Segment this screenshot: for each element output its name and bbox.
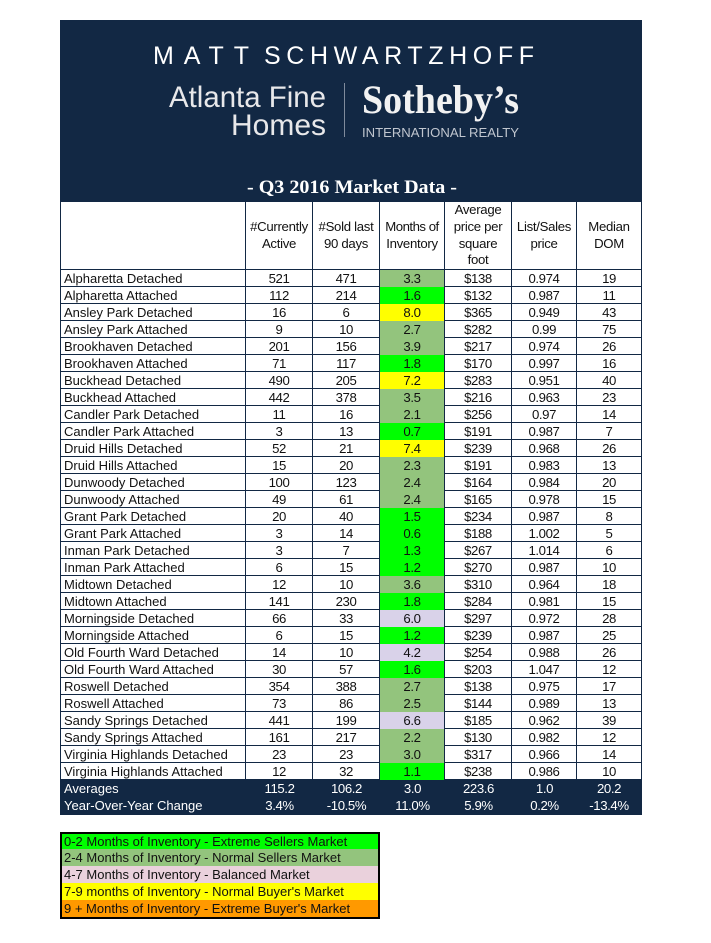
row: Midtown Detached: 10: [339, 577, 353, 592]
row: Sandy Springs Attached: 161: [269, 730, 289, 745]
row: Candler Park Detached: 11: [273, 407, 285, 422]
row: Inman Park Attached: 0.987: [528, 560, 560, 575]
logo: Atlanta Fine Homes: Homes: [231, 109, 326, 142]
row: Virginia Highlands Detached: 14: [602, 747, 616, 762]
row: Roswell Attached: 13: [602, 696, 616, 711]
row: Inman Park Attached: Inman Park Attached: [64, 560, 185, 575]
row: Brookhaven Detached: 26: [602, 339, 616, 354]
row: Druid Hills Attached: $191: [464, 458, 492, 473]
row: Ansley Park Detached: [61, 304, 641, 321]
row: Druid Hills Attached: 0.983: [528, 458, 560, 473]
row: Roswell Detached: 354: [269, 679, 289, 694]
row: Morningside Attached: $239: [464, 628, 492, 643]
row: Grant Park Attached: 0.6: [403, 526, 421, 541]
row: Ansley Park Attached: 9: [276, 322, 282, 337]
row: year-over-year change: [61, 797, 641, 814]
row: Virginia Highlands Detached: $317: [464, 747, 492, 762]
table header row: Median: [588, 219, 630, 234]
row: Old Fourth Ward Detached: 10: [339, 645, 353, 660]
row: Midtown Detached: $310: [464, 577, 492, 592]
row: Grant Park Detached: 40: [339, 509, 353, 524]
row: Roswell Detached: Roswell Detached: [64, 679, 169, 694]
table header row: Active: [262, 236, 296, 250]
row: Old Fourth Ward Attached: 30: [272, 662, 286, 677]
row: Inman Park Detached: 1.3: [403, 543, 421, 558]
row: Dunwoody Detached: Dunwoody Detached: [64, 475, 185, 490]
market data table: [61, 202, 641, 814]
row: Virginia Highlands Attached: Virginia Highlands Attached: [64, 764, 223, 779]
row: Old Fourth Ward Detached: [61, 644, 641, 661]
row: Midtown Attached: $284: [464, 594, 492, 609]
row: Virginia Highlands Detached: 0.966: [528, 747, 560, 762]
row: Sandy Springs Attached: 12: [602, 730, 616, 745]
row: Roswell Attached: 86: [339, 696, 353, 711]
row: Buckhead Attached: 23: [602, 390, 616, 405]
row: Old Fourth Ward Attached: Old Fourth Ward Attached: [64, 662, 214, 677]
row: Morningside Attached: 1.2: [403, 628, 421, 643]
row: Buckhead Attached: 0.963: [528, 390, 560, 405]
row: Morningside Attached: 15: [339, 628, 353, 643]
row: Dunwoody Detached: $164: [464, 475, 492, 490]
row: Brookhaven Attached: 16: [602, 356, 616, 371]
row: averages: [61, 780, 641, 797]
row: Druid Hills Attached: 15: [272, 458, 286, 473]
row: Midtown Attached: 0.981: [528, 594, 560, 609]
row: Alpharetta Detached: 0.974: [528, 271, 560, 286]
row: Candler Park Attached: 13: [339, 424, 353, 439]
row: Sandy Springs Detached: $185: [464, 713, 492, 728]
row: Old Fourth Ward Detached: 14: [272, 645, 286, 660]
legend item: extreme sellers market: 0-2 Months of Inventory - Extreme Sellers Market: [64, 834, 347, 849]
row: Virginia Highlands Detached: 23: [272, 747, 286, 762]
row: Roswell Detached: 0.975: [528, 679, 560, 694]
row: Inman Park Detached: 3: [276, 543, 282, 558]
row: Sandy Springs Attached: $130: [464, 730, 492, 745]
row: Brookhaven Detached: 0.974: [528, 339, 560, 354]
row: Morningside Detached: 33: [339, 611, 353, 626]
row: averages: 20.2: [597, 780, 621, 796]
table header row: Average: [455, 202, 501, 217]
row: Sandy Springs Detached: 6.6: [403, 713, 421, 728]
row: Grant Park Attached: 1.002: [528, 526, 560, 541]
row: year-over-year change: Year-Over-Year Change: [64, 798, 203, 812]
row: Grant Park Detached: [61, 508, 641, 525]
row: Inman Park Attached: 6: [276, 560, 282, 575]
row: Old Fourth Ward Attached: 57: [339, 662, 353, 677]
row: Grant Park Detached: 20: [272, 509, 286, 524]
row: Dunwoody Attached: 2.4: [403, 492, 421, 507]
row: Roswell Attached: [61, 695, 641, 712]
logo: Atlanta Fine Homes: Atlanta Fine: [169, 81, 326, 114]
row: Buckhead Detached: 40: [602, 373, 616, 388]
row: Inman Park Attached: 10: [602, 560, 616, 575]
row: Sandy Springs Detached: 441: [269, 713, 289, 728]
row: year-over-year change: 11.0%: [395, 798, 430, 812]
row: Old Fourth Ward Detached: Old Fourth Ward Detached: [64, 645, 219, 660]
row: Candler Park Attached: 0.987: [528, 424, 560, 439]
panel: navy header and table background: [60, 20, 642, 815]
row: Brookhaven Attached: 71: [272, 356, 286, 371]
row: Roswell Detached: 17: [602, 679, 616, 694]
row: Alpharetta Attached: [61, 287, 641, 304]
row: Inman Park Attached: $270: [464, 560, 492, 575]
row: Sandy Springs Detached: Sandy Springs Detached: [64, 713, 208, 728]
row: Druid Hills Detached: 52: [272, 441, 286, 456]
row: Morningside Attached: Morningside Attached: [64, 628, 189, 643]
row: Alpharetta Detached: [61, 270, 641, 287]
row: Ansley Park Detached: 8.0: [403, 305, 421, 320]
table header row: Inventory: [386, 236, 438, 250]
row: Buckhead Detached: $283: [464, 373, 492, 388]
row: Roswell Detached: 2.7: [403, 679, 421, 694]
row: Morningside Attached: 25: [602, 628, 616, 643]
row: Alpharetta Detached: $138: [464, 271, 492, 286]
row: Virginia Highlands Attached: $238: [464, 764, 492, 779]
row: Ansley Park Attached: 75: [602, 322, 616, 337]
row: Inman Park Detached: Inman Park Detached: [64, 543, 190, 558]
row: Candler Park Attached: 3: [276, 424, 282, 439]
row: Sandy Springs Detached: 39: [602, 713, 616, 728]
row: Candler Park Attached: 0.7: [403, 424, 421, 439]
row: Roswell Attached: 0.989: [528, 696, 560, 711]
row: Sandy Springs Detached: 0.962: [528, 713, 560, 728]
row: Druid Hills Detached: 0.968: [528, 441, 560, 456]
row: Druid Hills Detached: [61, 440, 641, 457]
row: Virginia Highlands Attached: 0.986: [528, 764, 560, 779]
row: Grant Park Detached: $234: [464, 509, 492, 524]
row: Buckhead Attached: 378: [336, 390, 356, 405]
row: Alpharetta Detached: 521: [269, 271, 289, 286]
row: Old Fourth Ward Detached: 4.2: [403, 645, 421, 660]
legend item: extreme buyer's market: 9 + Months of Inventory - Extreme Buyer's Market: [64, 901, 350, 916]
row: Brookhaven Attached: $170: [464, 356, 492, 371]
logo: Sotheby's International Realty: Sotheby’s: [362, 77, 519, 122]
row: Alpharetta Attached: $132: [464, 288, 492, 303]
row: Brookhaven Detached: Brookhaven Detached: [64, 339, 193, 354]
logo divider: [344, 83, 345, 137]
row: Ansley Park Attached: 0.99: [532, 322, 556, 337]
legend: months of inventory colour key: [60, 832, 380, 919]
row: Ansley Park Detached: 6: [343, 305, 349, 320]
row: Brookhaven Attached: Brookhaven Attached: [64, 356, 188, 371]
header: name and brokerage logo: [153, 42, 534, 198]
row: Buckhead Attached: [61, 389, 641, 406]
row: Dunwoody Detached: 100: [269, 475, 289, 490]
row: Buckhead Detached: 0.951: [528, 373, 560, 388]
row: Grant Park Attached: Grant Park Attached: [64, 526, 181, 541]
row: Ansley Park Detached: 16: [272, 305, 286, 320]
table header row: price: [530, 236, 558, 250]
row: year-over-year change: -13.4%: [589, 798, 629, 812]
row: Inman Park Detached: [61, 542, 641, 559]
row: Druid Hills Attached: 20: [339, 458, 353, 473]
row: Buckhead Attached: 442: [269, 390, 289, 405]
table header row: square: [459, 236, 497, 250]
row: Midtown Detached: Midtown Detached: [64, 577, 172, 592]
row: Grant Park Attached: $188: [464, 526, 492, 541]
logo: Sotheby's International Realty: [362, 77, 520, 140]
row: Grant Park Attached: 3: [276, 526, 282, 541]
row: Alpharetta Attached: 1.6: [403, 288, 421, 303]
table header row: [61, 202, 641, 814]
row: Dunwoody Attached: Dunwoody Attached: [64, 492, 180, 507]
row: averages: 115.2: [264, 780, 295, 796]
row: Inman Park Detached: 7: [343, 543, 349, 558]
row: Buckhead Attached: 3.5: [403, 390, 421, 405]
row: averages: 1.0: [536, 780, 553, 796]
row: Sandy Springs Attached: 0.982: [528, 730, 560, 745]
row: Inman Park Detached: $267: [464, 543, 492, 558]
row: Morningside Attached: [61, 627, 641, 644]
row: Brookhaven Detached: 3.9: [403, 339, 421, 354]
row: Midtown Detached: 18: [602, 577, 616, 592]
row: Dunwoody Attached: 15: [602, 492, 616, 507]
row: Grant Park Detached: Grant Park Detached: [64, 509, 186, 524]
row: Druid Hills Attached: Druid Hills Attached: [64, 458, 177, 473]
row: Alpharetta Attached: 214: [336, 288, 356, 303]
row: Dunwoody Attached: [61, 491, 641, 508]
row: Inman Park Attached: 15: [339, 560, 353, 575]
row: Druid Hills Detached: 26: [602, 441, 616, 456]
row: Morningside Detached: 28: [602, 611, 616, 626]
row: Candler Park Detached: Candler Park Detached: [64, 407, 199, 422]
row: Morningside Detached: 66: [272, 611, 286, 626]
row: Dunwoody Detached: 20: [602, 475, 616, 490]
row: Brookhaven Detached: $217: [464, 339, 492, 354]
row: Old Fourth Ward Attached: 12: [602, 662, 616, 677]
row: Buckhead Detached: 205: [336, 373, 356, 388]
row: Ansley Park Detached: 43: [602, 305, 616, 320]
row: Candler Park Detached: 16: [339, 407, 353, 422]
row: Midtown Attached: 230: [336, 594, 356, 609]
row: Ansley Park Attached: $282: [464, 322, 492, 337]
row: year-over-year change: 3.4%: [265, 798, 294, 812]
row: averages: 223.6: [463, 780, 494, 796]
table header row: List/Sales: [517, 219, 571, 234]
row: Druid Hills Detached: 7.4: [403, 441, 421, 456]
row: Candler Park Detached: $256: [464, 407, 492, 422]
row: Dunwoody Attached: 61: [339, 492, 353, 507]
row: Old Fourth Ward Attached: $203: [464, 662, 492, 677]
table header row: DOM: [594, 236, 624, 250]
row: Morningside Detached: 0.972: [528, 611, 560, 626]
row: Old Fourth Ward Detached: $254: [464, 645, 492, 660]
table header row: #Currently: [250, 219, 308, 234]
legend item: normal sellers market: 2-4 Months of Inventory - Normal Sellers Market: [64, 850, 341, 865]
row: Alpharetta Attached: 0.987: [528, 288, 560, 303]
subtitle: Q3 2016 Market Data: - Q3 2016 Market Data -: [247, 177, 457, 198]
row: Brookhaven Detached: [61, 338, 641, 355]
row: Ansley Park Attached: 2.7: [403, 322, 421, 337]
row: Old Fourth Ward Attached: 1.6: [403, 662, 421, 677]
row: Morningside Detached: [61, 610, 641, 627]
row: Midtown Attached: [61, 593, 641, 610]
row: Roswell Attached: $144: [464, 696, 492, 711]
row: Sandy Springs Attached: Sandy Springs Attached: [64, 730, 203, 745]
title: agent name: SCHWARTZHOFF: [264, 42, 534, 70]
row: Ansley Park Attached: Ansley Park Attached: [64, 322, 188, 337]
row: Midtown Attached: 15: [602, 594, 616, 609]
row: Candler Park Detached: 2.1: [403, 407, 421, 422]
row: Alpharetta Attached: 112: [269, 288, 289, 303]
row: Alpharetta Detached: Alpharetta Detached: [64, 271, 183, 286]
row: Virginia Highlands Detached: 3.0: [403, 747, 421, 762]
row: Druid Hills Detached: $239: [464, 441, 492, 456]
row: Alpharetta Attached: Alpharetta Attached: [64, 288, 177, 303]
row: Roswell Detached: [61, 678, 641, 695]
row: Alpharetta Detached: 3.3: [403, 271, 421, 286]
row: averages: 106.2: [331, 780, 362, 796]
row: Ansley Park Attached: [61, 321, 641, 338]
row: Dunwoody Attached: 49: [272, 492, 286, 507]
row: Brookhaven Attached: 0.997: [528, 356, 560, 371]
row: Old Fourth Ward Attached: [61, 661, 641, 678]
row: Buckhead Attached: Buckhead Attached: [64, 390, 176, 405]
row: averages: Averages: [64, 780, 119, 796]
table header row: foot: [468, 252, 488, 267]
row: Roswell Attached: 73: [272, 696, 286, 711]
row: Virginia Highlands Detached: [61, 746, 641, 763]
row: Ansley Park Attached: 10: [339, 322, 353, 337]
row: Dunwoody Detached: 2.4: [403, 475, 421, 490]
logo: Atlanta Fine Homes: [169, 81, 326, 142]
row: Virginia Highlands Detached: 23: [339, 747, 353, 762]
row: Candler Park Attached: $191: [464, 424, 492, 439]
row: Candler Park Attached: [61, 423, 641, 440]
row: Roswell Detached: 388: [336, 679, 356, 694]
row: Ansley Park Detached: 0.949: [528, 305, 560, 320]
row: Midtown Detached: [61, 576, 641, 593]
row: Alpharetta Attached: 11: [603, 288, 615, 303]
title: agent name: MATT: [153, 42, 249, 70]
row: Roswell Attached: Roswell Attached: [64, 696, 164, 711]
row: Inman Park Attached: [61, 559, 641, 576]
row: Buckhead Attached: $216: [464, 390, 492, 405]
row: Grant Park Attached: 14: [339, 526, 353, 541]
row: Virginia Highlands Attached: 32: [339, 764, 353, 779]
row: year-over-year change: 0.2%: [530, 798, 559, 812]
table header row: 90 days: [324, 236, 368, 250]
legend item: balanced market: 4-7 Months of Inventory - Balanced Market: [64, 867, 310, 882]
row: Sandy Springs Attached: 2.2: [403, 730, 421, 745]
row: averages: 3.0: [404, 780, 421, 796]
row: Morningside Attached: 6: [276, 628, 282, 643]
row: Buckhead Detached: [61, 372, 641, 389]
row: Sandy Springs Detached: [61, 712, 641, 729]
row: Druid Hills Detached: 21: [339, 441, 353, 456]
row: Inman Park Detached: 1.014: [528, 543, 560, 558]
row: Brookhaven Detached: 201: [269, 339, 289, 354]
row: Virginia Highlands Attached: 10: [602, 764, 616, 779]
row: Inman Park Attached: 1.2: [403, 560, 421, 575]
row: Morningside Attached: 0.987: [528, 628, 560, 643]
row: Alpharetta Detached: 19: [602, 271, 616, 286]
row: Midtown Attached: Midtown Attached: [64, 594, 167, 609]
row: Candler Park Detached: [61, 406, 641, 423]
row: Buckhead Detached: 490: [269, 373, 289, 388]
row: Druid Hills Attached: [61, 457, 641, 474]
row: Dunwoody Attached: 0.978: [528, 492, 560, 507]
logo: Sotheby's International Realty: INTERNATIONAL REALTY: [362, 126, 520, 140]
legend item: balanced market: [62, 866, 378, 883]
row: Brookhaven Attached: 1.8: [403, 356, 421, 371]
row: Grant Park Attached: [61, 525, 641, 542]
row: Old Fourth Ward Attached: 1.047: [528, 662, 560, 677]
legend item: normal buyer's market: 7-9 months of Inventory - Normal Buyer's Market: [64, 884, 344, 899]
row: Grant Park Detached: 0.987: [528, 509, 560, 524]
row: Brookhaven Attached: 117: [336, 356, 356, 371]
row: Midtown Attached: 1.8: [403, 594, 421, 609]
row: Grant Park Attached: 5: [606, 526, 612, 541]
row: Inman Park Detached: 6: [606, 543, 612, 558]
row: Ansley Park Detached: Ansley Park Detached: [64, 305, 193, 320]
row: Candler Park Attached: Candler Park Attached: [64, 424, 194, 439]
row: Druid Hills Attached: 2.3: [403, 458, 421, 473]
row: Grant Park Detached: 1.5: [403, 509, 421, 524]
row: Virginia Highlands Attached: 12: [272, 764, 286, 779]
row: year-over-year change: 5.9%: [464, 798, 493, 812]
row: Ansley Park Detached: $365: [464, 305, 492, 320]
row: Dunwoody Attached: $165: [464, 492, 492, 507]
row: Candler Park Detached: 14: [602, 407, 616, 422]
row: Midtown Detached: 0.964: [528, 577, 560, 592]
row: Midtown Detached: 3.6: [403, 577, 421, 592]
row: Druid Hills Detached: Druid Hills Detached: [64, 441, 182, 456]
row: Dunwoody Detached: 123: [336, 475, 356, 490]
row: Buckhead Detached: Buckhead Detached: [64, 373, 181, 388]
row: Old Fourth Ward Detached: 26: [602, 645, 616, 660]
row: Sandy Springs Attached: 217: [336, 730, 356, 745]
row: Morningside Detached: $297: [464, 611, 492, 626]
row: Brookhaven Attached: [61, 355, 641, 372]
row: Roswell Detached: $138: [464, 679, 492, 694]
row: Brookhaven Detached: 156: [336, 339, 356, 354]
row: Candler Park Attached: 7: [606, 424, 612, 439]
row: Virginia Highlands Attached: 1.1: [403, 764, 421, 779]
row: Old Fourth Ward Detached: 0.988: [528, 645, 560, 660]
table header row: price per: [454, 219, 502, 234]
row: Alpharetta Detached: 471: [336, 271, 356, 286]
row: Morningside Detached: Morningside Detached: [64, 611, 194, 626]
row: Midtown Detached: 12: [272, 577, 286, 592]
row: Druid Hills Attached: 13: [602, 458, 616, 473]
row: Virginia Highlands Detached: Virginia Highlands Detached: [64, 747, 228, 762]
row: Dunwoody Detached: 0.984: [528, 475, 560, 490]
row: Candler Park Detached: 0.97: [532, 407, 556, 422]
row: Dunwoody Detached: [61, 474, 641, 491]
row: Grant Park Detached: 8: [606, 509, 612, 524]
row: Sandy Springs Attached: [61, 729, 641, 746]
row: Roswell Attached: 2.5: [403, 696, 421, 711]
row: Virginia Highlands Attached: [61, 763, 641, 780]
row: Buckhead Detached: 7.2: [403, 373, 421, 388]
table header row: #Sold last: [319, 219, 373, 234]
row: year-over-year change: -10.5%: [327, 798, 366, 812]
row: Morningside Detached: 6.0: [403, 611, 421, 626]
row: Midtown Attached: 141: [269, 594, 289, 609]
row: Sandy Springs Detached: 199: [336, 713, 356, 728]
table header row: Months of: [385, 219, 439, 234]
